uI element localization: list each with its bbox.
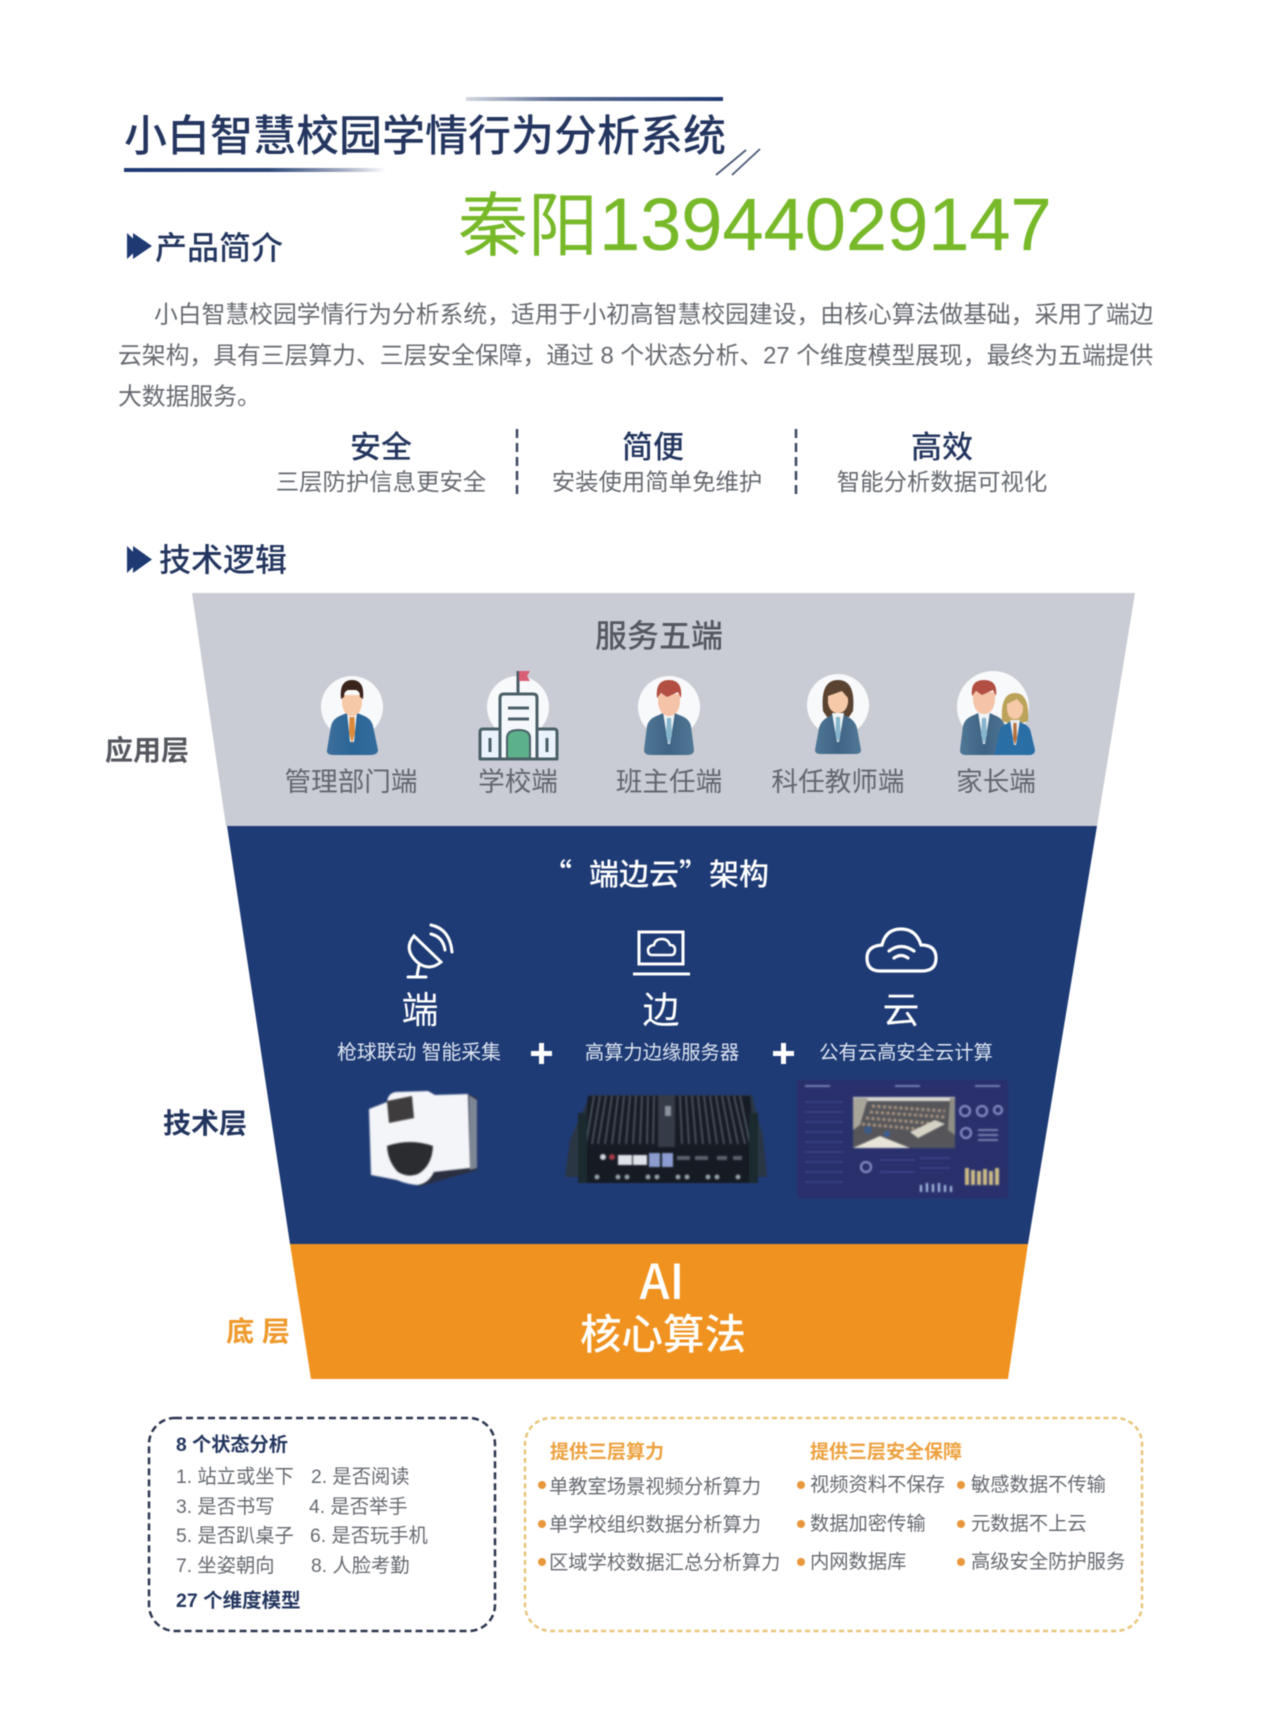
state list: 2. 是否阅读 — [311, 1466, 410, 1488]
panel: application layer — [192, 593, 1135, 826]
compute and security items: 视频资料不保存 — [810, 1474, 945, 1496]
panel: compute and security box — [525, 1418, 1142, 1631]
image: dashboard screenshot — [797, 1080, 1008, 1198]
compute and security items: 数据加密传输 — [810, 1513, 926, 1535]
state list: 5. 是否趴桌子 — [176, 1525, 294, 1547]
label: application layer: 应用层 — [105, 735, 189, 766]
compute and security items: 高级安全防护服务 — [971, 1551, 1125, 1573]
state list: 8. 人脸考勤 — [311, 1555, 410, 1577]
icon: edge laptop — [633, 932, 690, 974]
feature: simple: 安装使用简单免维护 — [552, 469, 762, 495]
compute and security items: 区域学校数据汇总分析算力 — [549, 1552, 780, 1574]
endpoint labels: 管理部门端 — [285, 767, 417, 797]
title: 小白智慧校园学情行为分析系统 — [124, 113, 726, 161]
contact phone number: 秦阳 — [458, 187, 598, 265]
endpoint labels: 班主任端 — [616, 767, 722, 797]
plus signs — [531, 1043, 794, 1064]
column descriptions — [337, 1042, 993, 1064]
compute and security items: 元数据不上云 — [971, 1513, 1087, 1535]
label: technology layer: 技术层 — [163, 1108, 247, 1139]
column descriptions: 公有云高安全云计算 — [819, 1042, 993, 1064]
state list — [176, 1466, 428, 1577]
endpoint labels: 学校端 — [478, 767, 558, 797]
heading: 27 dimensions: 27 个维度模型 — [176, 1589, 301, 1612]
heading: five endpoints: 服务五端 — [595, 618, 723, 654]
feature: simple: 简便 — [622, 430, 684, 465]
panel: technology layer — [227, 826, 1097, 1244]
divider — [516, 429, 518, 494]
column descriptions: 高算力边缘服务器 — [585, 1042, 739, 1064]
column titles: 端 — [402, 990, 438, 1031]
compute and security items: 单学校组织数据分析算力 — [549, 1514, 761, 1536]
title — [124, 97, 760, 175]
feature: safe: 安全 — [350, 430, 412, 465]
bullets — [538, 1481, 965, 1566]
heading: edge cloud architecture: “ — [542, 850, 572, 894]
heading: 8 states: 8 个状态分析 — [176, 1433, 288, 1456]
panel: analysis box — [149, 1418, 495, 1631]
feature: efficient — [837, 430, 1047, 495]
endpoint labels: 科任教师端 — [772, 767, 904, 797]
label: base layer: 底 层 — [226, 1316, 290, 1347]
endpoint labels: 家长端 — [956, 767, 1036, 797]
heading: security: 提供三层安全保障 — [810, 1440, 962, 1463]
heading: tech logic: 技术逻辑 — [159, 542, 287, 578]
icon: satellite dish — [408, 925, 452, 977]
icon: class teacher person — [638, 676, 700, 755]
column titles — [402, 990, 920, 1031]
compute and security items: 单教室场景视频分析算力 — [549, 1476, 761, 1498]
divider — [795, 429, 797, 494]
image: edge server — [565, 1095, 767, 1183]
icon: parents — [957, 671, 1035, 755]
column descriptions: 枪球联动 智能采集 — [337, 1042, 501, 1064]
intro paragraph — [118, 302, 1154, 410]
panel: core algorithm layer — [290, 1243, 1028, 1379]
icon: admin person — [321, 676, 383, 755]
heading: compute: 提供三层算力 — [550, 1440, 664, 1463]
column titles: 云 — [882, 990, 920, 1031]
icon: school building — [480, 671, 557, 759]
state list: 6. 是否玩手机 — [310, 1525, 428, 1547]
icon: cloud wifi — [867, 929, 936, 971]
contact phone number: 13944029147 — [599, 183, 1052, 266]
feature: efficient: 智能分析数据可视化 — [837, 469, 1047, 495]
state list: 3. 是否书写 — [176, 1496, 275, 1518]
feature: safe: 三层防护信息更安全 — [276, 469, 486, 495]
intro paragraph: 云架构，具有三层算力、三层安全保障，通过 8 个状态分析、27 个维度模型展现，最终为五端提供 — [118, 342, 1153, 370]
state list: 7. 坐姿朝向 — [176, 1555, 275, 1577]
icon: subject teacher person — [807, 674, 869, 754]
column titles: 边 — [642, 990, 680, 1031]
state list: 1. 站立或坐下 — [176, 1466, 294, 1488]
compute and security items: 敏感数据不传输 — [971, 1474, 1106, 1496]
AI: AI — [640, 1243, 684, 1313]
heading: product intro: 产品简介 — [155, 230, 283, 266]
feature: safe — [276, 430, 486, 495]
feature: efficient: 高效 — [911, 430, 973, 465]
compute and security items: 内网数据库 — [810, 1551, 906, 1573]
image: camera — [369, 1091, 477, 1187]
endpoint labels — [285, 767, 1036, 797]
state list: 4. 是否举手 — [309, 1496, 408, 1518]
core algorithm: 核心算法 — [580, 1311, 746, 1358]
compute and security items — [549, 1474, 1125, 1574]
intro paragraph: 小白智慧校园学情行为分析系统，适用于小初高智慧校园建设，由核心算法做基础，采用了端边 — [154, 302, 1154, 328]
feature: simple — [552, 430, 762, 495]
intro paragraph: 大数据服务。 — [118, 384, 261, 410]
heading: edge cloud architecture: 端边云”架构 — [589, 850, 769, 894]
